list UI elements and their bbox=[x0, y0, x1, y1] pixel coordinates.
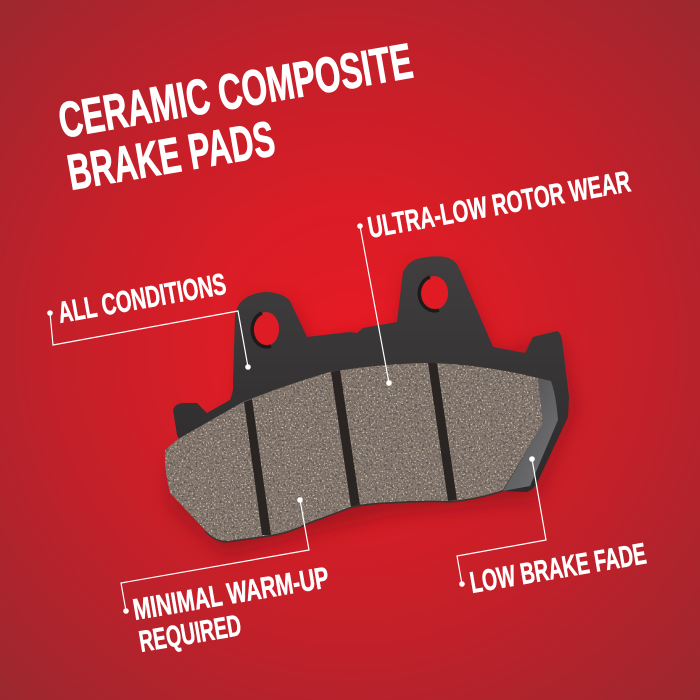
callout: low brake fade bbox=[457, 456, 649, 600]
callout: minimal warm-up required: REQUIRED bbox=[137, 609, 244, 659]
callout: minimal warm-up required: MINIMAL WARM-UP bbox=[131, 561, 331, 627]
callout: all conditions: ALL CONDITIONS bbox=[55, 268, 229, 330]
callout: minimal warm-up required bbox=[121, 497, 331, 659]
pad grooves bbox=[244, 363, 457, 535]
title: BRAKE PADS bbox=[63, 110, 279, 201]
chamfered metal edge bbox=[503, 378, 558, 491]
pad shadow bbox=[170, 270, 575, 555]
friction surface underside edge bbox=[205, 472, 503, 543]
backing plate bbox=[173, 256, 569, 510]
friction surface bbox=[160, 360, 550, 545]
callout: all conditions bbox=[47, 268, 251, 370]
brake pad bbox=[160, 256, 575, 555]
hole rims bbox=[252, 313, 271, 347]
holes showing background bbox=[252, 311, 280, 347]
callout: ultra-low rotor wear bbox=[357, 165, 633, 386]
title bbox=[54, 33, 417, 201]
title: CERAMIC COMPOSITE bbox=[54, 33, 417, 149]
